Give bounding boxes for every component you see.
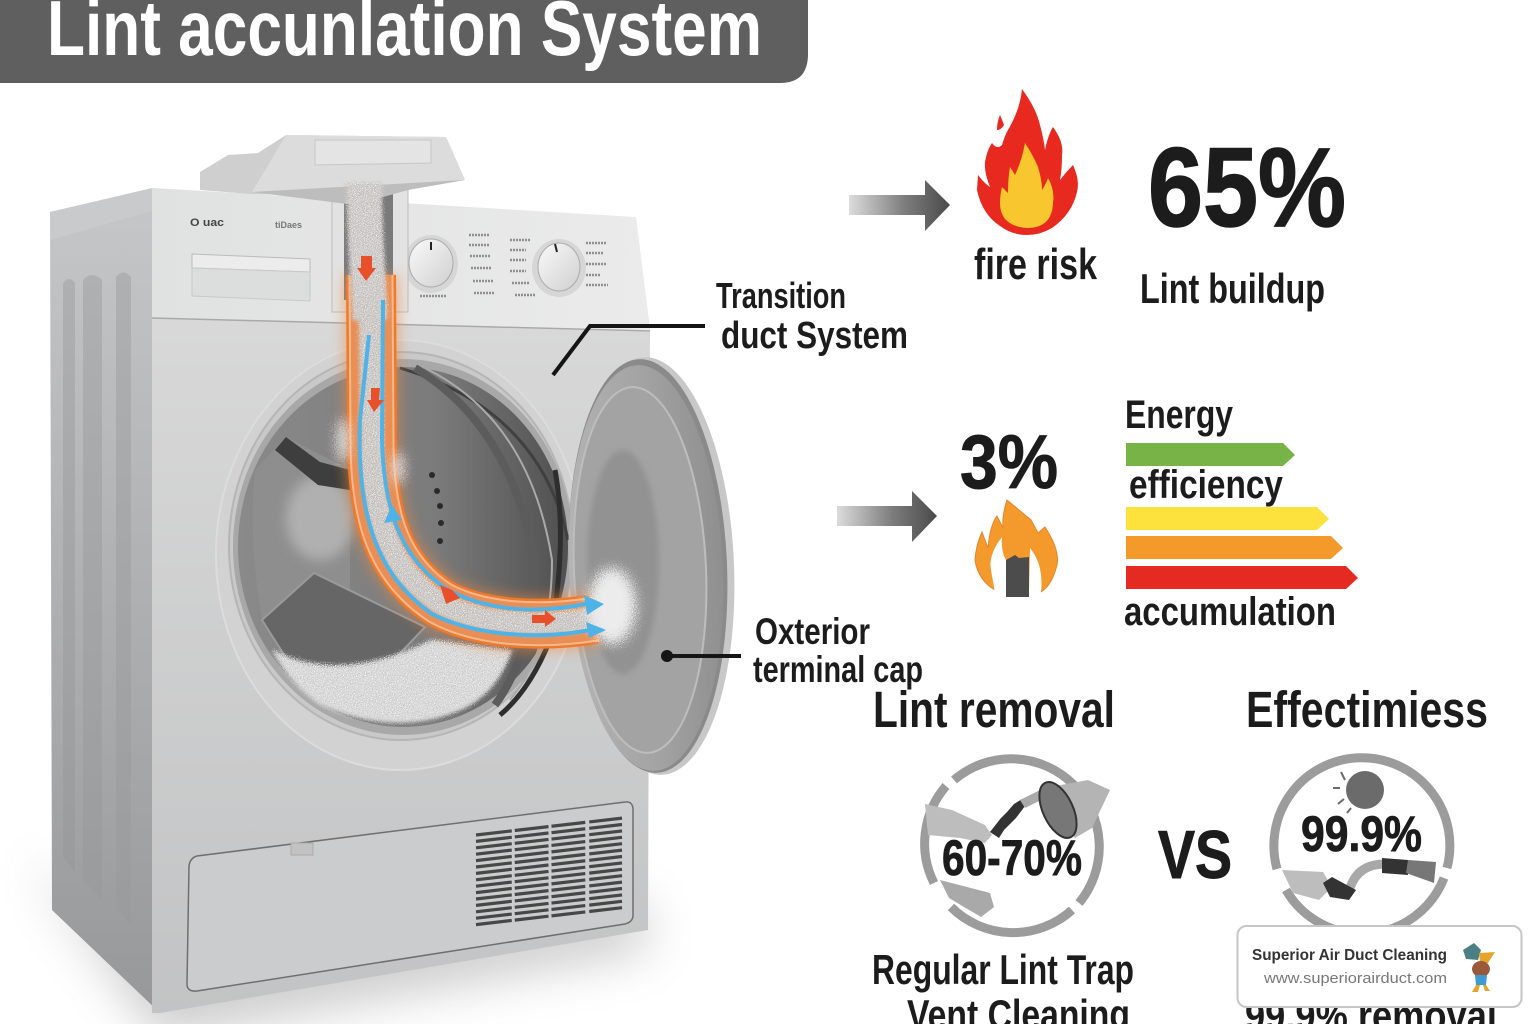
- right dial: [532, 239, 586, 297]
- orange duct wall: [371, 275, 596, 624]
- stray lint right of duct: [392, 452, 404, 484]
- value: 99.9%: [1301, 806, 1422, 862]
- caption: regular lint trap: [872, 946, 1134, 1024]
- label: Oxterior: [755, 611, 870, 652]
- drum left light wall: [253, 437, 350, 620]
- duct bracket on control panel: [332, 180, 408, 312]
- drum bright patch: [286, 476, 354, 560]
- lint in duct: [370, 300, 600, 623]
- control panel: [152, 188, 650, 332]
- arrow to fire risk: [849, 180, 950, 231]
- floor shadow: [30, 860, 650, 1024]
- dryer illustration: [30, 135, 743, 1024]
- arrow to 3%: [837, 491, 937, 542]
- title banner: [0, 0, 808, 83]
- ring: [1274, 758, 1450, 934]
- left dial: [404, 235, 458, 293]
- drum perforations: [429, 472, 444, 544]
- icon: sun: [1333, 771, 1384, 813]
- duct inner tone: [371, 275, 596, 624]
- dryer side panel: [50, 188, 160, 1013]
- comparison: vent cleaning circle: [1274, 758, 1450, 934]
- blue air stream upper: [382, 300, 590, 610]
- orange bar: [1126, 536, 1343, 559]
- company name: Superior Air Duct Cleaning: [1252, 947, 1447, 964]
- lint trap housing: [200, 135, 465, 205]
- lint column at top: [364, 182, 370, 320]
- stray lint near duct: [337, 418, 349, 462]
- drum right ribs: [400, 368, 568, 715]
- open door: [560, 354, 743, 778]
- lint spray at outlet: [588, 568, 636, 644]
- lower access panel: [187, 802, 633, 991]
- stat: 65%: 65%: [1148, 125, 1346, 250]
- dial option labels: [420, 235, 608, 296]
- website: www.superiorairduct.com: [1263, 970, 1447, 987]
- label: lint buildup: Lint buildup: [1140, 265, 1325, 312]
- caption: regular lint trap: Regular Lint Trap: [872, 946, 1134, 993]
- drum back plate: [262, 573, 425, 672]
- comparison: lint trap circle: [925, 759, 1110, 933]
- red flow arrows: [357, 256, 556, 627]
- duct highlight: [371, 275, 596, 624]
- value: 60-70%: [942, 830, 1082, 886]
- vent grille: [476, 818, 623, 925]
- icon: hand and brush: [925, 776, 1110, 917]
- door ring: [216, 340, 584, 770]
- drum interior: [238, 367, 568, 727]
- detergent drawer: [192, 254, 310, 301]
- callout: exterior terminal cap: terminal cap: [753, 649, 923, 690]
- green bar: [1126, 443, 1295, 466]
- stat: 3%: 3%: [960, 420, 1058, 505]
- callout: exterior terminal cap: [661, 611, 923, 690]
- icon: hand and vacuum hose: [1282, 858, 1436, 900]
- label: energy: Energy: [1125, 393, 1234, 437]
- callout: transition duct: duct System: [721, 315, 908, 357]
- blue air stream lower: [360, 335, 590, 635]
- drum dark strut: [275, 437, 350, 490]
- dryer front body: [152, 188, 650, 1013]
- label: accumulation: accumulation: [1124, 590, 1336, 634]
- watermark card: [1238, 926, 1522, 1007]
- icon: fire: [977, 89, 1078, 235]
- heat glow: [371, 275, 596, 624]
- duct glow and lint flow: [337, 182, 636, 644]
- ring: [925, 759, 1099, 933]
- energy efficiency chart: [1124, 393, 1358, 634]
- brand logo: O uac: [190, 217, 224, 229]
- icon: flame with chimney: [975, 500, 1058, 597]
- leader with dot: [661, 650, 741, 662]
- leader line: [553, 326, 705, 375]
- blue arrowheads: [384, 505, 606, 638]
- callout: transition duct: [553, 275, 908, 375]
- model label: tiDaes: [275, 220, 302, 230]
- VS label: VS: [1158, 817, 1232, 893]
- red bar: [1126, 566, 1358, 589]
- yellow bar: [1126, 507, 1329, 530]
- lint pile: [272, 640, 512, 723]
- heading: lint removal: Lint removal: [873, 681, 1115, 738]
- label: efficiency: efficiency: [1129, 463, 1284, 507]
- icon: mascot: [1463, 943, 1495, 992]
- label: fire risk: fire risk: [974, 240, 1097, 289]
- label: Transition: [716, 275, 846, 316]
